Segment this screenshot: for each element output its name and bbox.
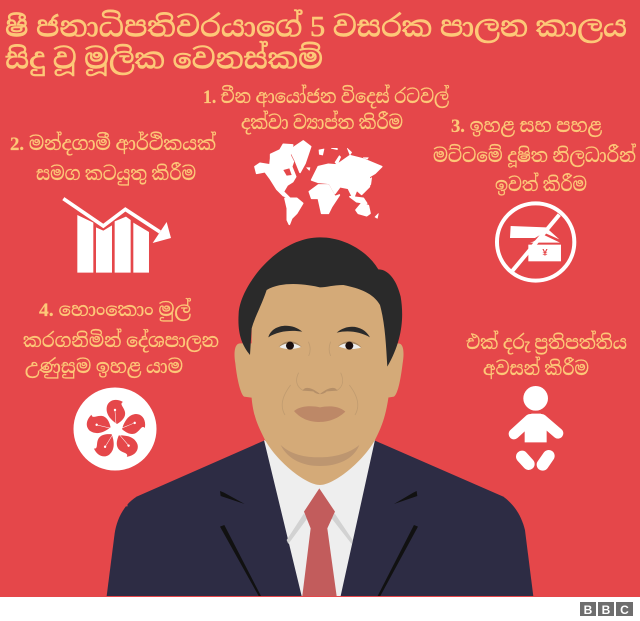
item 4 text: Hong Kong: කරගනිමින් දේශපාලන (23, 328, 219, 353)
item 4 text: Hong Kong: 4. හොංකොං මුල් (39, 298, 192, 322)
item 3 text: corrupt officials: ඉවත් කිරීම (495, 172, 587, 196)
BBC logo (580, 602, 633, 617)
ears (235, 343, 404, 398)
hair (238, 237, 402, 367)
item 3 text: corrupt officials (433, 116, 636, 196)
item 1 text: overseas investment (203, 84, 450, 134)
item 1 text: overseas investment: දක්වා ව්‍යාප්ත කිරීම (241, 110, 403, 134)
item 2 text: slowing economy: 2. මන්දගාමී ආර්ථිකයක් (10, 131, 217, 155)
item 3 text: corrupt officials: මට්ටමේ දූෂිත නිලධාරීන් (433, 143, 636, 168)
icon: no bribery (497, 203, 574, 281)
face (252, 280, 388, 485)
item 5 text: one-child policy: අවසන් කිරීම (483, 356, 589, 380)
head (235, 237, 404, 485)
item 2 text: slowing economy: සමග කටයුතු කිරීම (36, 161, 196, 185)
BBC logo: B (602, 603, 611, 617)
icon: world map (255, 141, 382, 224)
eyes (279, 341, 362, 348)
eyebrows (268, 326, 370, 337)
BBC logo: C (620, 603, 629, 617)
nose and face lines (282, 342, 358, 415)
portrait figure (107, 237, 533, 596)
title: ෂී ජනාධිපතිවරයාගේ 5 වසරක පාලන කාලය (5, 8, 627, 43)
icon: baby (514, 386, 558, 465)
suit jacket (107, 440, 533, 596)
item 2 text: slowing economy (10, 131, 217, 185)
icon: Hong Kong flower (74, 388, 156, 470)
item 5 text: one-child policy: එක් දරු ප්‍රතිපත්තිය (466, 331, 627, 354)
item 4 text: Hong Kong: උණුසුම ඉහළ යාම (25, 356, 183, 379)
icon: declining bar chart (63, 199, 171, 273)
title: සිදු වූ මූලික වෙනස්කම් (5, 40, 323, 76)
icon: no bribery: ¥ (542, 248, 548, 258)
title (5, 8, 627, 76)
chin shadow (281, 445, 359, 466)
item 5 text: one-child policy (466, 331, 627, 380)
BBC logo: B (584, 603, 593, 617)
mouth (294, 406, 345, 422)
item 4 text: Hong Kong (23, 298, 219, 379)
item 3 text: corrupt officials: 3. ඉහළ සහ පහළ (451, 116, 602, 138)
item 1 text: overseas investment: 1. චීන ආයෝජන විදෙස් රටවල් (203, 84, 450, 109)
